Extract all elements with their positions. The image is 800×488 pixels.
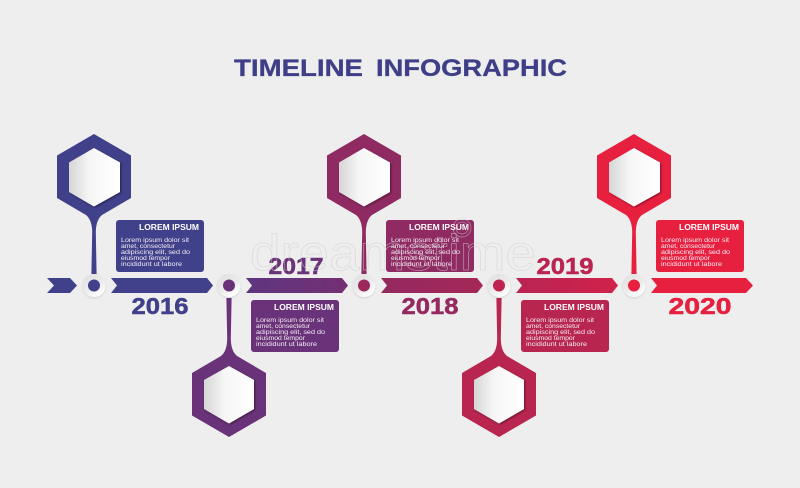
milestone 2016: [57, 134, 213, 319]
year 2017: 2017: [268, 253, 324, 279]
text box 2017: incididunt ut labore: [256, 341, 317, 348]
milestone 2018: [327, 134, 483, 319]
text box 2016: adipiscing elit, sed do: [121, 249, 190, 256]
text box 2020: Lorem ipsum dolor sit: [661, 237, 729, 244]
hexagon inner 2017: [204, 366, 254, 424]
text box 2018: incididunt ut labore: [391, 261, 452, 268]
watermark: dreamstime: [250, 225, 536, 281]
text box 2019: incididunt ut labore: [526, 341, 587, 348]
text box 2019: amet, consectetur: [526, 323, 581, 330]
text box 2017: eiusmod tempor: [256, 335, 306, 342]
text box 2019: LOREM IPSUM: [544, 303, 604, 312]
text box 2020: LOREM IPSUM: [679, 223, 739, 232]
text box 2016: LOREM IPSUM: [139, 223, 199, 232]
text box 2020: adipiscing elit, sed do: [661, 249, 730, 256]
text box 2017: amet, consectetur: [256, 323, 311, 330]
hexagon inner 2020: [609, 148, 660, 206]
text box 2020: eiusmod tempor: [661, 255, 711, 262]
title: TIMELINE: [234, 55, 363, 82]
text box 2017: LOREM IPSUM: [274, 303, 334, 312]
arrow 2017: [246, 278, 348, 293]
node 2017: [218, 274, 240, 297]
milestone 2020: [597, 134, 753, 319]
text box 2017: [251, 300, 339, 352]
text box 2016: amet, consectetur: [121, 243, 176, 250]
text box 2018: adipiscing elit, sed do: [391, 249, 460, 256]
text box 2017: Lorem ipsum dolor sit: [256, 317, 324, 324]
hexagon pin 2018: [327, 134, 401, 274]
arrow 2018: [381, 278, 483, 293]
year 2020: 2020: [668, 293, 732, 319]
hexagon pin 2016: [57, 134, 131, 274]
hexagon inner 2019: [474, 366, 524, 424]
title: [234, 55, 567, 82]
node 2018: [352, 274, 376, 297]
text box 2019: adipiscing elit, sed do: [526, 329, 595, 336]
arrow 2020: [651, 278, 753, 293]
title: INFOGRAPHIC: [376, 55, 567, 82]
hexagon inner 2018: [339, 148, 390, 206]
text box 2019: [521, 300, 609, 352]
year 2019: 2019: [536, 253, 594, 279]
text box 2016: eiusmod tempor: [121, 255, 171, 262]
node 2020: [622, 274, 646, 297]
hexagon pin 2020: [597, 134, 671, 274]
year 2018: 2018: [402, 293, 459, 319]
text box 2018: amet, consectetur: [391, 243, 446, 250]
text box 2019: Lorem ipsum dolor sit: [526, 317, 594, 324]
text box 2020: incididunt ut labore: [661, 261, 722, 268]
text box 2016: incididunt ut labore: [121, 261, 182, 268]
text box 2020: amet, consectetur: [661, 243, 716, 250]
text box 2018: [386, 220, 474, 272]
milestone 2019: [462, 253, 618, 437]
text box 2018: LOREM IPSUM: [409, 223, 469, 232]
hexagon pin 2017: [192, 298, 266, 437]
hexagon inner 2016: [69, 148, 120, 206]
text box 2020: [656, 220, 744, 272]
node 2016: [82, 274, 106, 297]
text box 2016: [116, 220, 204, 272]
text box 2017: adipiscing elit, sed do: [256, 329, 325, 336]
text box 2018: eiusmod tempor: [391, 255, 441, 262]
text box 2018: Lorem ipsum dolor sit: [391, 237, 459, 244]
year 2016: 2016: [132, 293, 188, 319]
arrow 2019: [516, 278, 618, 293]
hexagon pin 2019: [462, 298, 536, 437]
arrow 2016: [111, 278, 213, 293]
text box 2016: Lorem ipsum dolor sit: [121, 237, 189, 244]
lead-in arrow: [47, 278, 77, 293]
text box 2019: eiusmod tempor: [526, 335, 576, 342]
milestone 2017: [192, 253, 348, 437]
node 2019: [488, 274, 510, 297]
